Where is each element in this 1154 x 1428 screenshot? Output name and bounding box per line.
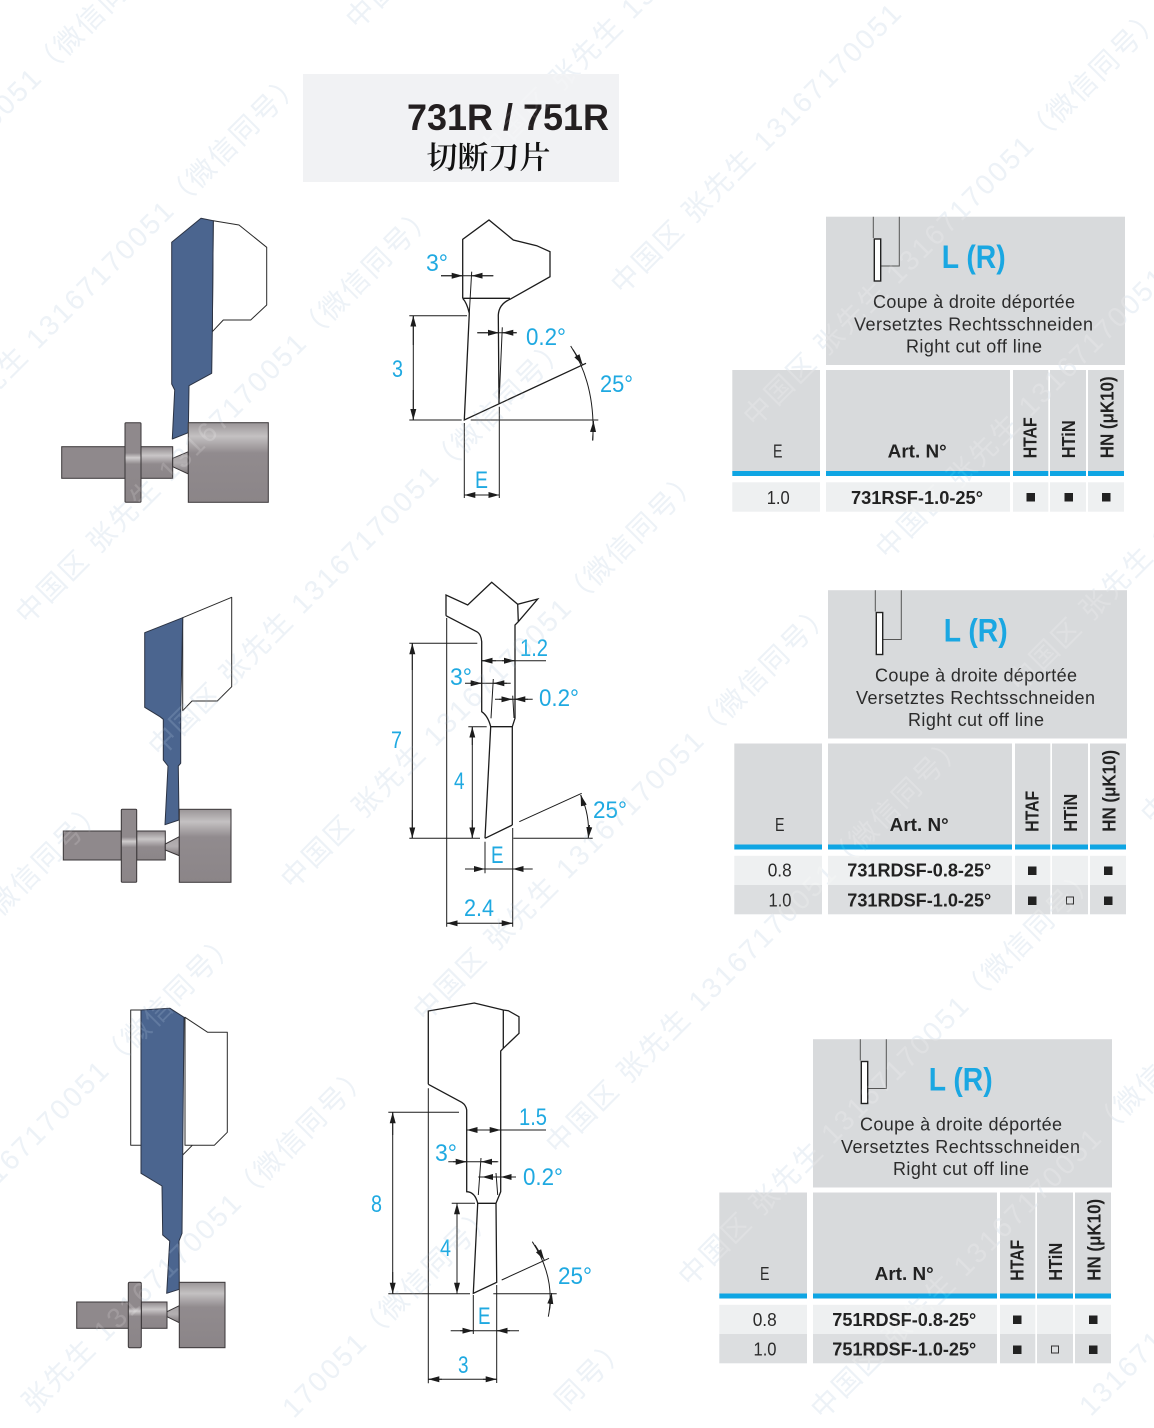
dimension 2.4 — [447, 618, 513, 927]
dimension 0.2 degrees — [477, 324, 566, 403]
text: 中国区 张先生 13167170051（微信同号） — [275, 462, 707, 895]
column headers: HTiN — [1046, 1243, 1066, 1281]
icon: right cut blade — [860, 1039, 886, 1104]
dimension E — [451, 1285, 519, 1383]
description: Versetztes Rechtsschneiden — [854, 315, 1093, 335]
dimension 25 degrees — [502, 1242, 592, 1317]
column headers: E — [775, 815, 784, 835]
text: 170051（微信同号） — [276, 1197, 502, 1424]
description — [854, 292, 1093, 357]
title: model numbers: 731R / 751R — [407, 97, 609, 138]
description: Coupe à droite déportée — [860, 1114, 1062, 1134]
description: Versetztes Rechtsschneiden — [856, 688, 1095, 708]
column headers: E — [773, 442, 782, 462]
illustration: 731RDSF blade and workpiece — [63, 597, 232, 882]
text: 中国区 张先生 13167170051（微信同号） — [540, 727, 972, 1160]
technical drawing: 731RDSF — [391, 582, 627, 927]
technical drawing: 751RDSF — [371, 1003, 592, 1383]
holder outline — [183, 597, 232, 711]
data row 0.8: 731RDSF-0.8-25° — [847, 861, 991, 881]
column headers: HTAF — [1008, 1240, 1028, 1281]
description — [856, 666, 1095, 730]
column headers: HTAF — [1021, 417, 1041, 458]
description: Versetztes Rechtsschneiden — [841, 1137, 1080, 1157]
data row 0.8: 751RDSF-0.8-25° — [832, 1310, 976, 1330]
blue blade — [172, 218, 213, 439]
data row 1.0: 1.0 — [768, 891, 792, 911]
heading L (R): L (R) — [944, 612, 1008, 648]
column headers — [734, 744, 1126, 850]
column headers — [719, 1192, 1111, 1298]
dimension 25 degrees: 25° — [593, 797, 627, 824]
blade outline — [446, 582, 538, 838]
column headers: HN (μK10) — [1084, 1199, 1104, 1281]
text: 中国区 张先生 13167170051（微信同号） — [672, 860, 1105, 1292]
dimension E — [465, 828, 533, 927]
blade outline — [428, 1003, 519, 1293]
dimension 0.2 degrees: 0.2° — [526, 324, 566, 351]
dimension 4 — [454, 727, 487, 838]
dimension 3 degrees: 3° — [435, 1140, 457, 1167]
description: Coupe à droite déportée — [875, 666, 1077, 686]
dimension E — [464, 407, 499, 498]
cut direction header — [813, 1039, 1112, 1188]
holder outline — [212, 221, 267, 332]
title: Chinese subtitle: 切断刀片 — [426, 132, 550, 178]
dimension 0.2 degrees — [478, 1164, 563, 1195]
dimension 7 — [391, 643, 593, 838]
dimension 8: 8 — [371, 1191, 382, 1218]
holder outline — [183, 1017, 227, 1155]
cut direction header — [826, 217, 1125, 365]
text: 张先生 13167170051（微信同号） — [16, 1057, 377, 1418]
dimension 4 — [440, 1203, 475, 1294]
dimension 3 — [392, 316, 598, 420]
data row 1.0 — [719, 1334, 1111, 1363]
dimension E: E — [491, 842, 504, 869]
dimension 1.2: 1.2 — [520, 635, 548, 662]
dimension 0.2 degrees: 0.2° — [523, 1164, 563, 1191]
table panel: 751RDSF — [719, 1039, 1112, 1363]
holder back plate — [131, 1010, 141, 1145]
dimension 3: 3 — [458, 1352, 468, 1379]
title panel — [303, 74, 619, 182]
column headers: HN (μK10) — [1099, 750, 1119, 832]
dimension 1.5: 1.5 — [519, 1104, 547, 1131]
dimension 0.2 degrees: 0.2° — [539, 685, 579, 712]
data row 0.8: 0.8 — [753, 1310, 777, 1330]
column headers: HN (μK10) — [1097, 376, 1117, 458]
dimension 25 degrees — [571, 346, 633, 441]
data row: 731RSF-1.0-25° — [851, 488, 983, 508]
workpiece — [62, 423, 268, 502]
blue blade — [145, 618, 183, 825]
icon: right cut blade — [875, 590, 901, 654]
dimension 2.4: 2.4 — [464, 895, 494, 922]
dimension 3 — [428, 1088, 497, 1383]
data row 0.8 — [734, 856, 1126, 885]
text: 同号） — [549, 1330, 635, 1416]
data row: 1.0 — [767, 488, 790, 508]
dimension 25 degrees — [519, 793, 627, 838]
technical drawing: 731RSF — [392, 220, 633, 498]
column headers: Art. N° — [890, 815, 949, 835]
description: Right cut off line — [908, 710, 1044, 730]
column headers: HTiN — [1061, 794, 1081, 832]
column headers: HTiN — [1059, 420, 1079, 458]
dimension 7: 7 — [391, 727, 402, 754]
dimension 3: 3 — [392, 356, 403, 383]
dimension 1.5 — [467, 1104, 547, 1131]
dimension E: E — [478, 1303, 490, 1330]
blade outline — [463, 220, 586, 420]
data row 0.8 — [719, 1305, 1111, 1334]
dimension 3 degrees: 3° — [426, 250, 448, 277]
text: 中国区 张先生 13167170051（微信同号） — [142, 330, 575, 762]
dimension 25 degrees: 25° — [600, 371, 633, 398]
dimension 8 — [371, 1112, 557, 1294]
illustration: 751RDSF blade and workpiece — [77, 1008, 227, 1348]
dimension 3 degrees: 3° — [450, 664, 472, 691]
table panel: 731RDSF — [734, 590, 1127, 914]
column headers: HTAF — [1023, 791, 1043, 832]
icon: right cut blade — [873, 217, 899, 281]
dimension 4: 4 — [440, 1235, 451, 1262]
dimension 3 degrees — [435, 1140, 498, 1195]
column headers: E — [760, 1264, 770, 1284]
heading L (R): L (R) — [942, 239, 1006, 275]
column headers: Art. N° — [888, 442, 947, 462]
column headers: Art. N° — [875, 1264, 934, 1284]
heading L (R): L (R) — [929, 1062, 993, 1098]
workpiece — [63, 809, 231, 882]
description: Right cut off line — [893, 1159, 1029, 1179]
column headers — [732, 370, 1124, 476]
data row — [732, 482, 1124, 512]
text: 中国区 张先生 13167170051（微信同号） — [407, 595, 840, 1027]
cut direction header — [828, 590, 1127, 738]
table panel: 731RSF — [732, 217, 1125, 512]
data row 0.8: 0.8 — [768, 861, 792, 881]
text: 中国区 张先生 13167170051（微信同号） — [10, 197, 442, 630]
dimension 3 degrees — [450, 664, 511, 718]
illustration: 731RSF blade and workpiece — [62, 218, 268, 502]
description — [841, 1114, 1080, 1179]
data row 1.0: 731RDSF-1.0-25° — [847, 891, 991, 911]
workpiece — [77, 1282, 225, 1348]
description: Right cut off line — [906, 337, 1042, 357]
data row 1.0: 1.0 — [754, 1340, 776, 1360]
dimension 25 degrees: 25° — [558, 1263, 592, 1290]
dimension 1.2 — [482, 635, 548, 662]
blue blade — [141, 1008, 184, 1293]
dimension 4: 4 — [454, 768, 464, 795]
dimension 0.2 degrees — [495, 685, 579, 718]
data row 1.0 — [734, 885, 1126, 914]
description: Coupe à droite déportée — [873, 292, 1075, 312]
data row 1.0: 751RDSF-1.0-25° — [832, 1340, 976, 1360]
dimension 3 degrees — [426, 250, 493, 313]
dimension E: E — [475, 467, 488, 494]
